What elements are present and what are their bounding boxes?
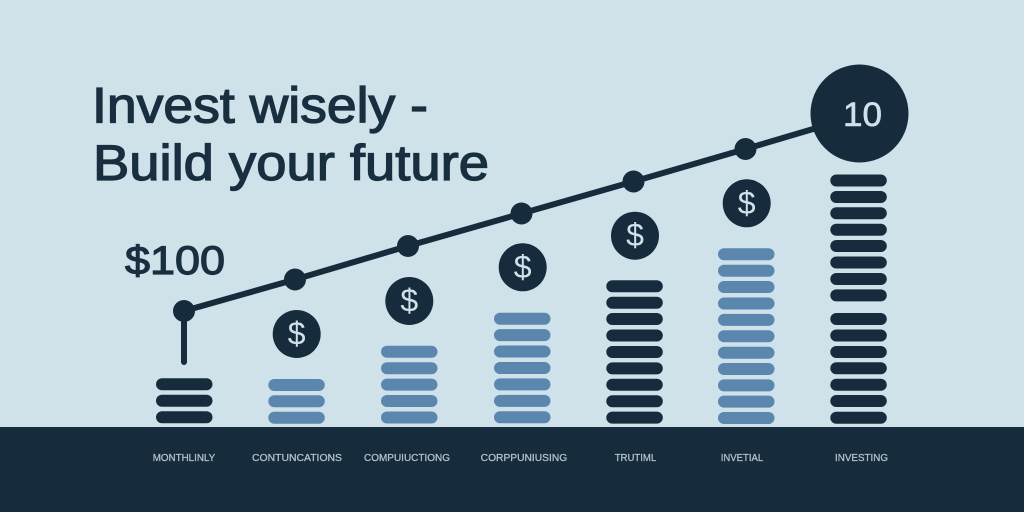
footer labels: MONTHLINLY xyxy=(153,453,216,464)
footer labels: INVESTING xyxy=(835,453,888,464)
icon: dollar coin 1 xyxy=(273,310,321,358)
footer band xyxy=(0,427,1024,512)
coin stack 5 xyxy=(606,280,663,424)
coin stack 2 xyxy=(268,379,325,424)
final value circle: 10 xyxy=(843,96,882,134)
title: Build your future xyxy=(93,135,489,191)
coin stack 1 xyxy=(156,378,212,423)
icon: dollar coin 1: $ xyxy=(288,316,306,352)
footer labels: CORPPUNIUSING xyxy=(481,453,567,464)
final value circle xyxy=(810,64,908,162)
icon: dollar coin 2 xyxy=(385,277,433,325)
icon: dollar coin 4 xyxy=(611,212,659,260)
footer labels: COMPUIUCTIONG xyxy=(364,453,450,464)
icon: dollar coin 3: $ xyxy=(514,249,532,285)
coin stack 6 xyxy=(718,248,774,424)
footer labels xyxy=(153,453,888,464)
footer labels: INVETIAL xyxy=(721,453,764,464)
title: Invest wisely - xyxy=(92,78,428,134)
icon: dollar coin 3 xyxy=(499,243,547,291)
coin stack 4 xyxy=(494,313,550,423)
footer labels: CONTUNCATIONS xyxy=(252,453,342,464)
coin stack 7 xyxy=(830,174,887,424)
icon: dollar coin 5 xyxy=(723,179,771,227)
icon: dollar coin 4: $ xyxy=(626,217,644,253)
icon: dollar coin 5: $ xyxy=(738,185,756,221)
growth line xyxy=(173,124,830,362)
icon: dollar coin 2: $ xyxy=(400,282,418,318)
starting amount label: $100 xyxy=(125,239,225,283)
coin stack 3 xyxy=(381,346,438,424)
title xyxy=(92,78,489,191)
footer labels: TRUTIML xyxy=(615,453,657,464)
